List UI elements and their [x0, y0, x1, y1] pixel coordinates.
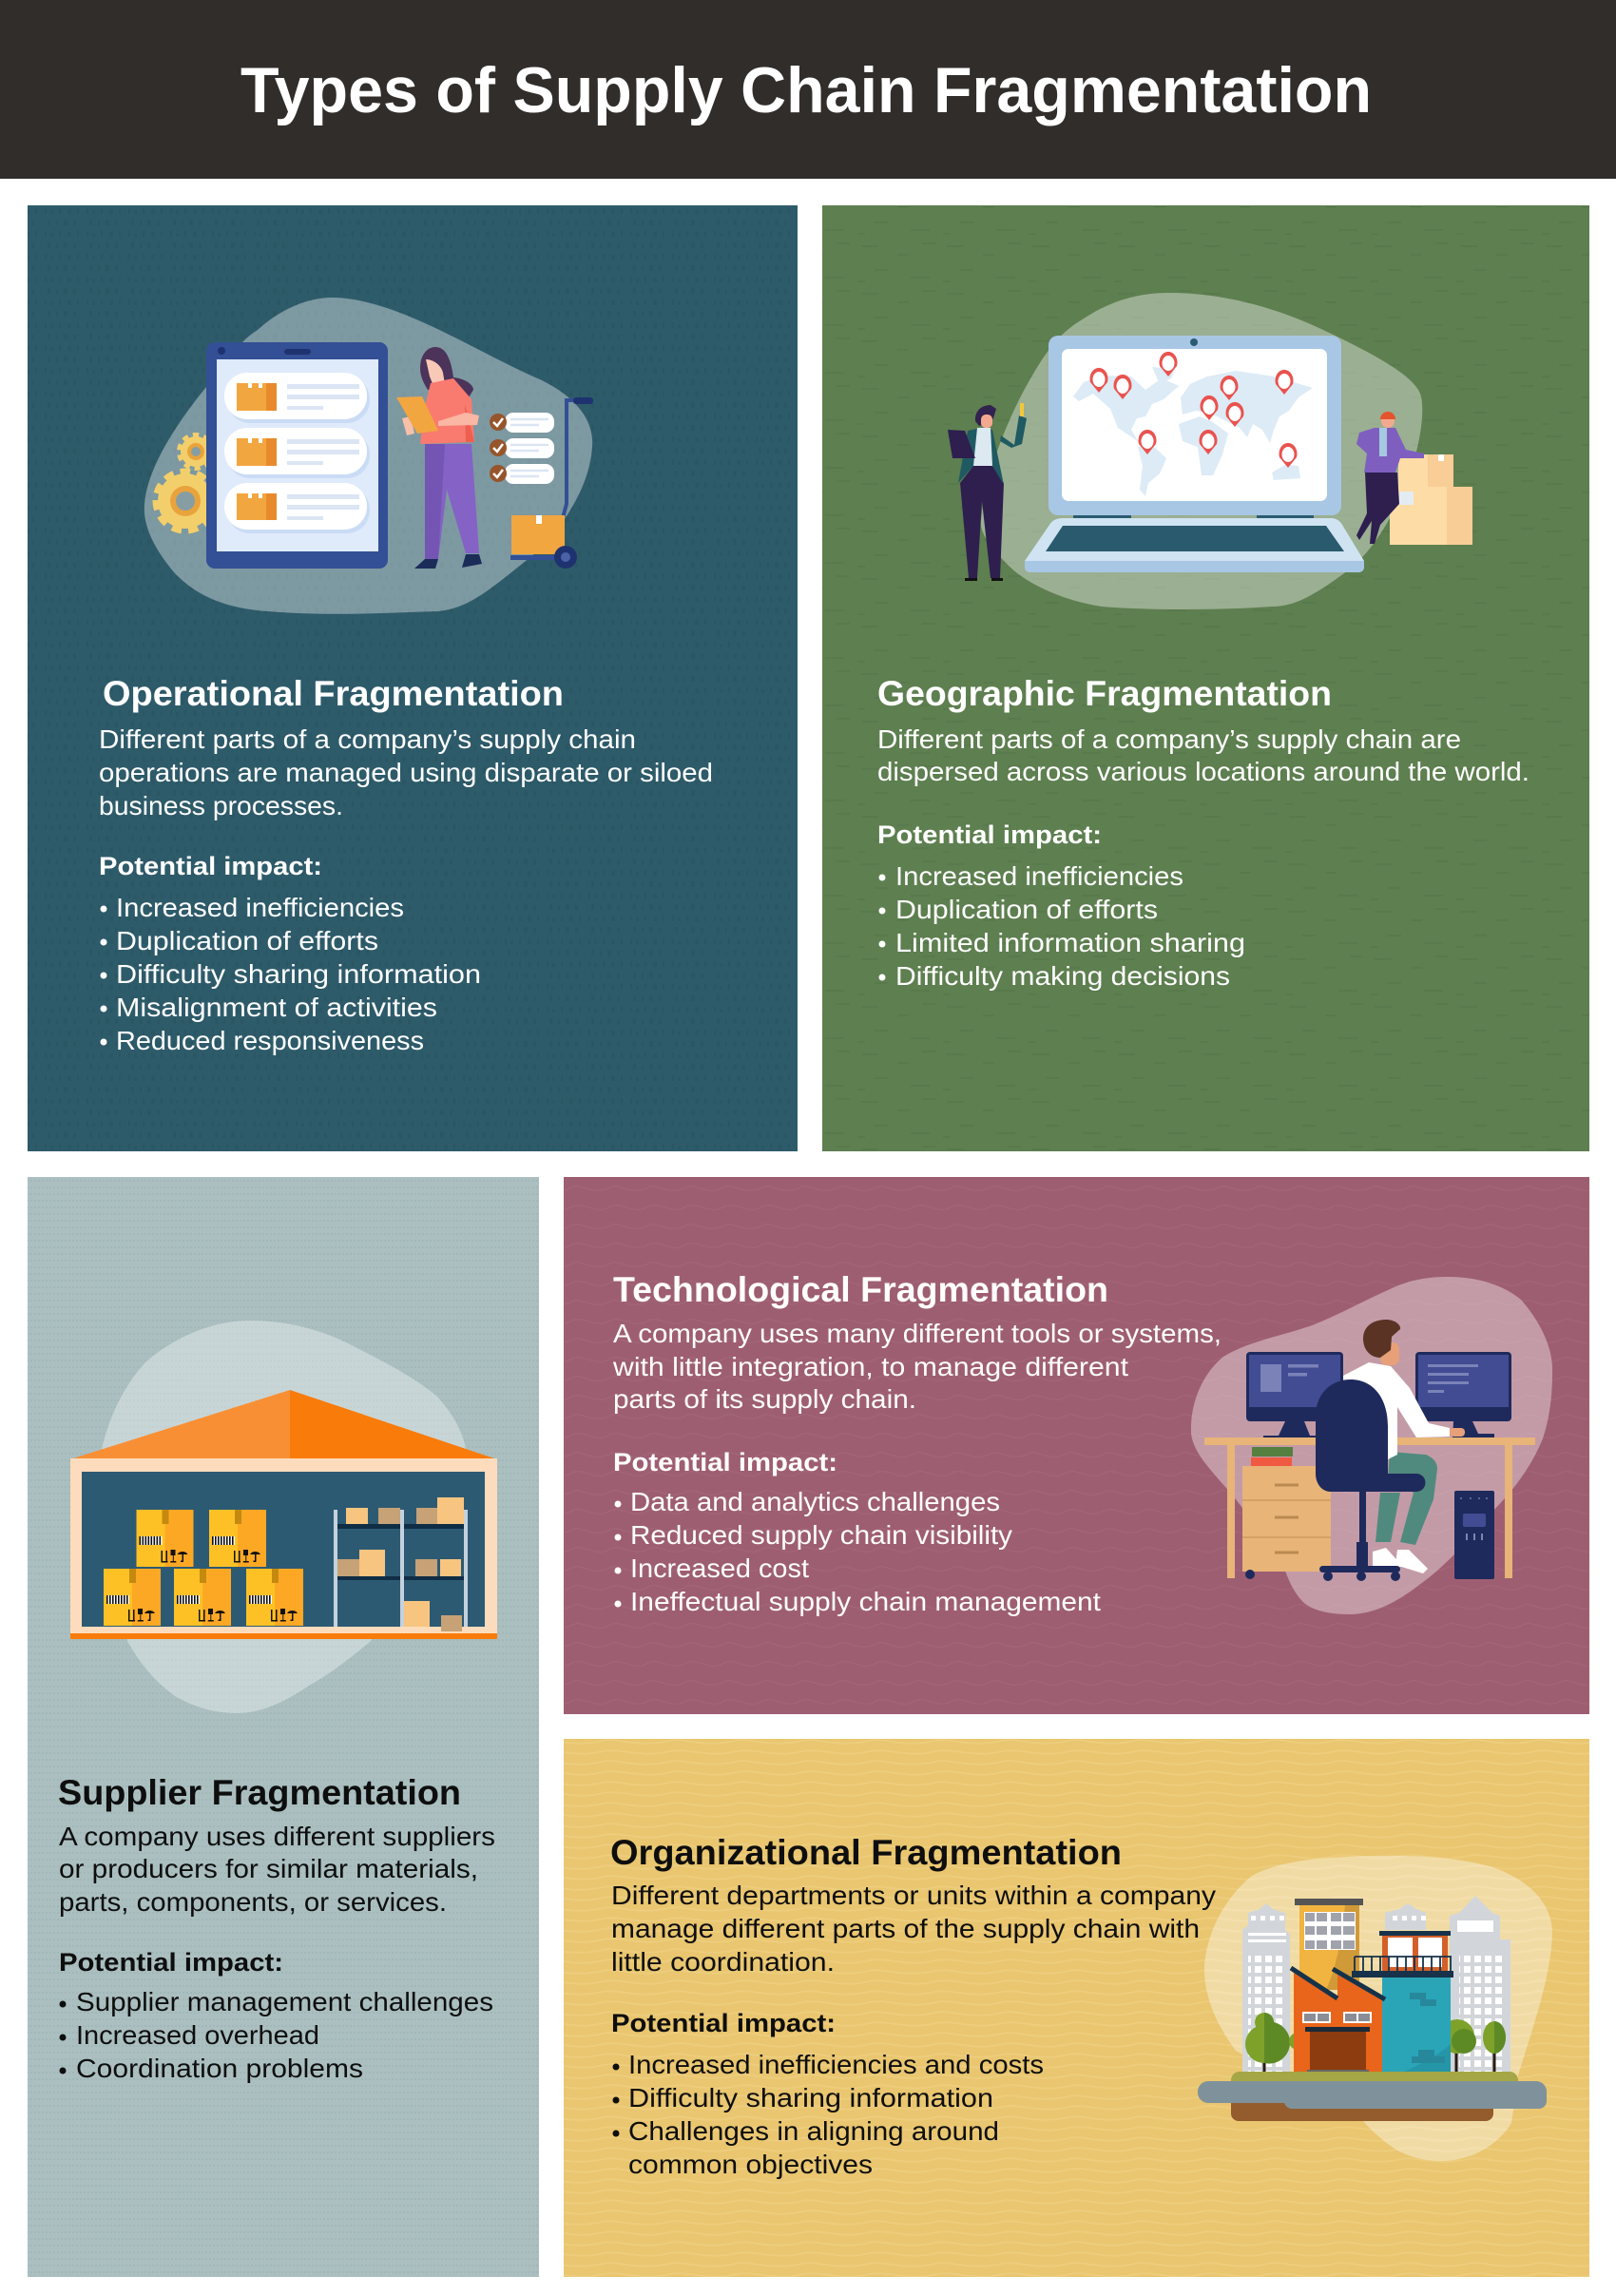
potential impact list: Reduced supply chain visibility — [630, 1520, 1012, 1550]
description: with little integration, to manage different — [612, 1352, 1128, 1381]
icon: laptop — [1025, 336, 1364, 572]
potential impact list: Coordination problems — [76, 2054, 363, 2083]
description: dispersed across various locations around the world. — [877, 757, 1529, 786]
potential impact list: Limited information sharing — [895, 928, 1245, 957]
description — [99, 724, 713, 820]
potential impact list: Data and analytics challenges — [630, 1487, 1000, 1516]
yellow tower — [1295, 1899, 1363, 1990]
icon: monitors — [1246, 1352, 1511, 1437]
description — [59, 1822, 495, 1917]
description: or producers for similar materials, — [59, 1854, 478, 1883]
warehouse frame and interior — [70, 1458, 497, 1639]
description: little coordination. — [611, 1947, 835, 1977]
potential impact list: Potential impact: — [611, 2009, 836, 2037]
teal building with balcony — [1352, 1931, 1453, 2074]
illustration: person at two monitors — [1191, 1277, 1552, 1614]
description: parts of its supply chain. — [613, 1384, 916, 1414]
icon: businessperson with clipboard — [948, 403, 1027, 581]
world map — [1073, 367, 1313, 496]
potential impact list: Duplication of efforts — [895, 895, 1158, 924]
description: A company uses different suppliers — [59, 1822, 495, 1851]
orange factory — [1291, 1968, 1385, 2076]
potential impact list: Potential impact: — [613, 1448, 837, 1476]
illustration: warehouse — [70, 1321, 497, 1713]
icon: delivery worker and boxes — [1356, 412, 1472, 545]
icon: seated man — [1343, 1320, 1465, 1573]
city skyline — [1242, 1896, 1510, 2073]
heading: Supplier Fragmentation — [58, 1773, 461, 1812]
potential impact list — [877, 820, 1245, 991]
heading: Operational Fragmentation — [103, 674, 564, 713]
map pins — [1089, 352, 1297, 468]
description: manage different parts of the supply chain with — [611, 1914, 1200, 1943]
heading: Technological Fragmentation — [613, 1270, 1108, 1309]
potential impact list — [611, 2009, 1044, 2179]
potential impact list: Difficulty making decisions — [895, 961, 1230, 991]
stacked cartons — [104, 1510, 303, 1626]
potential impact list: Potential impact: — [877, 820, 1102, 849]
description: Different departments or units within a company — [611, 1881, 1216, 1910]
title: Types of Supply Chain Fragmentation — [240, 54, 1372, 126]
potential impact list: Reduced responsiveness — [116, 1026, 424, 1055]
icon: computer tower — [1454, 1491, 1494, 1579]
header band — [0, 0, 1616, 179]
potential impact list: Difficulty sharing information — [116, 959, 481, 989]
description: A company uses many different tools or systems, — [613, 1319, 1222, 1348]
panel: geographic fragmentation — [822, 205, 1589, 1151]
icon: office chair — [1316, 1380, 1426, 1581]
potential impact list: common objectives — [628, 2150, 873, 2179]
roof — [73, 1390, 494, 1458]
illustration: buildings — [1198, 1856, 1552, 2161]
potential impact list: Increased inefficiencies — [895, 861, 1183, 891]
potential impact list: Potential impact: — [99, 852, 322, 880]
description: operations are managed using disparate or siloed — [99, 758, 713, 787]
potential impact list: Misalignment of activities — [116, 993, 437, 1022]
potential impact list: Difficulty sharing information — [628, 2083, 993, 2113]
icon: woman with clipboard — [396, 347, 482, 569]
potential impact list: Ineffectual supply chain management — [630, 1587, 1101, 1616]
shelving with boxes — [334, 1497, 468, 1631]
icon: gears — [157, 435, 214, 530]
ground layers — [1198, 2072, 1547, 2121]
panel: supplier fragmentation — [28, 1177, 539, 2277]
potential impact list — [59, 1948, 493, 2083]
heading: Geographic Fragmentation — [877, 674, 1332, 713]
potential impact list: Increased inefficiencies — [116, 893, 404, 922]
description — [611, 1881, 1216, 1977]
potential impact list: Supplier management challenges — [76, 1987, 493, 2016]
description: Different parts of a company’s supply chain are — [877, 724, 1461, 754]
panel: technological fragmentation — [564, 1177, 1589, 1714]
illustration: inventory tablet, woman and cart — [144, 298, 593, 614]
potential impact list: Increased overhead — [76, 2020, 319, 2050]
potential impact list — [99, 852, 481, 1055]
potential impact list: Challenges in aligning around — [628, 2116, 999, 2146]
illustration: laptop world map with two people — [948, 293, 1472, 609]
icon: hand cart with package — [510, 397, 593, 569]
description — [877, 724, 1529, 786]
description — [612, 1319, 1222, 1414]
icon: tablet with package list — [206, 342, 388, 569]
potential impact list: Potential impact: — [59, 1948, 283, 1977]
description: parts, components, or services. — [59, 1887, 447, 1917]
potential impact list: Increased cost — [630, 1553, 809, 1583]
potential impact list: Increased inefficiencies and costs — [628, 2050, 1044, 2079]
panel: operational fragmentation — [28, 205, 798, 1151]
description: Different parts of a company’s supply chain — [99, 724, 636, 754]
description: business processes. — [99, 791, 343, 820]
trees — [1245, 2013, 1506, 2072]
icon: desk and drawers — [1204, 1437, 1535, 1579]
panel: organizational fragmentation — [564, 1739, 1589, 2277]
potential impact list — [613, 1448, 1101, 1616]
heading: Organizational Fragmentation — [610, 1833, 1122, 1872]
potential impact list: Duplication of efforts — [116, 926, 378, 955]
icon: checklist — [490, 413, 554, 484]
